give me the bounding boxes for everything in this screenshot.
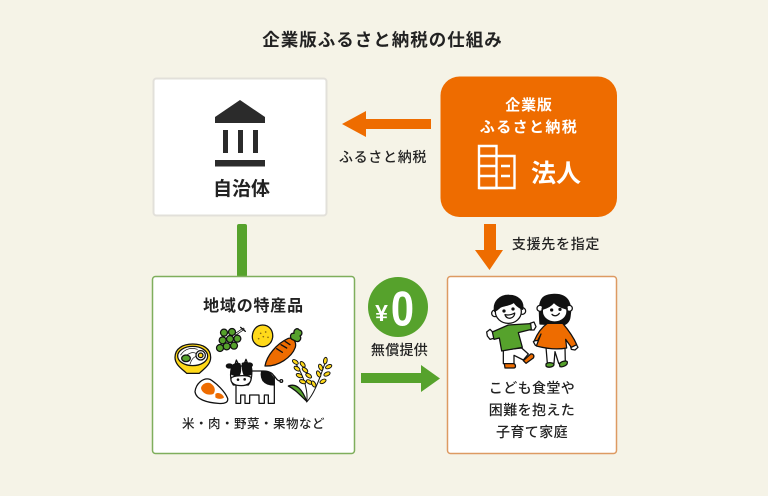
panel: local products [152, 276, 354, 454]
arrow: designate recipient [475, 224, 503, 270]
icon: office building [479, 146, 514, 188]
icon: boy [487, 295, 536, 368]
icon: carrot [265, 329, 302, 366]
text: corporate furusato tax: 企業版 [505, 96, 553, 114]
panel: corporation: ふるさと納税 [480, 119, 578, 136]
badge: zero yen [368, 277, 428, 337]
badge: zero yen: 0 [391, 281, 414, 336]
connector: municipality to products [237, 224, 247, 277]
panel: corporation [440, 76, 617, 217]
icon: cow [226, 359, 283, 403]
panel: children [448, 276, 616, 454]
label: municipality: 自治体 [213, 178, 270, 200]
children illustration [487, 294, 578, 368]
caption: product examples: 米・肉・野菜・果物など [182, 416, 325, 431]
panel: children: 子育て家庭 [496, 424, 568, 440]
food illustrations [175, 325, 332, 403]
icon: ramen bowl [175, 344, 211, 373]
badge: zero yen: ¥ [375, 300, 388, 326]
icon: potato [252, 325, 273, 347]
label: free provision: 無償提供 [371, 342, 428, 358]
title: 企業版ふるさと納税の仕組み [262, 30, 503, 50]
label: furusato tax: ふるさと納税 [339, 149, 427, 165]
icon: government building [215, 100, 265, 166]
panel: municipality [154, 78, 326, 216]
icon: meat [195, 379, 228, 403]
icon: girl [533, 294, 578, 367]
heading: local products: 地域の特産品 [203, 296, 304, 315]
icon: rice plant [288, 357, 332, 402]
arrow: products to families [361, 365, 440, 392]
panel: children: 困難を抱えた [489, 402, 575, 418]
arrow: furusato tax to municipality [342, 111, 431, 137]
label: corporation: 法人 [531, 160, 581, 188]
label: designate recipient: 支援先を指定 [512, 236, 600, 252]
text: recipients: こども食堂や [489, 380, 575, 396]
icon: grapes [216, 327, 245, 351]
